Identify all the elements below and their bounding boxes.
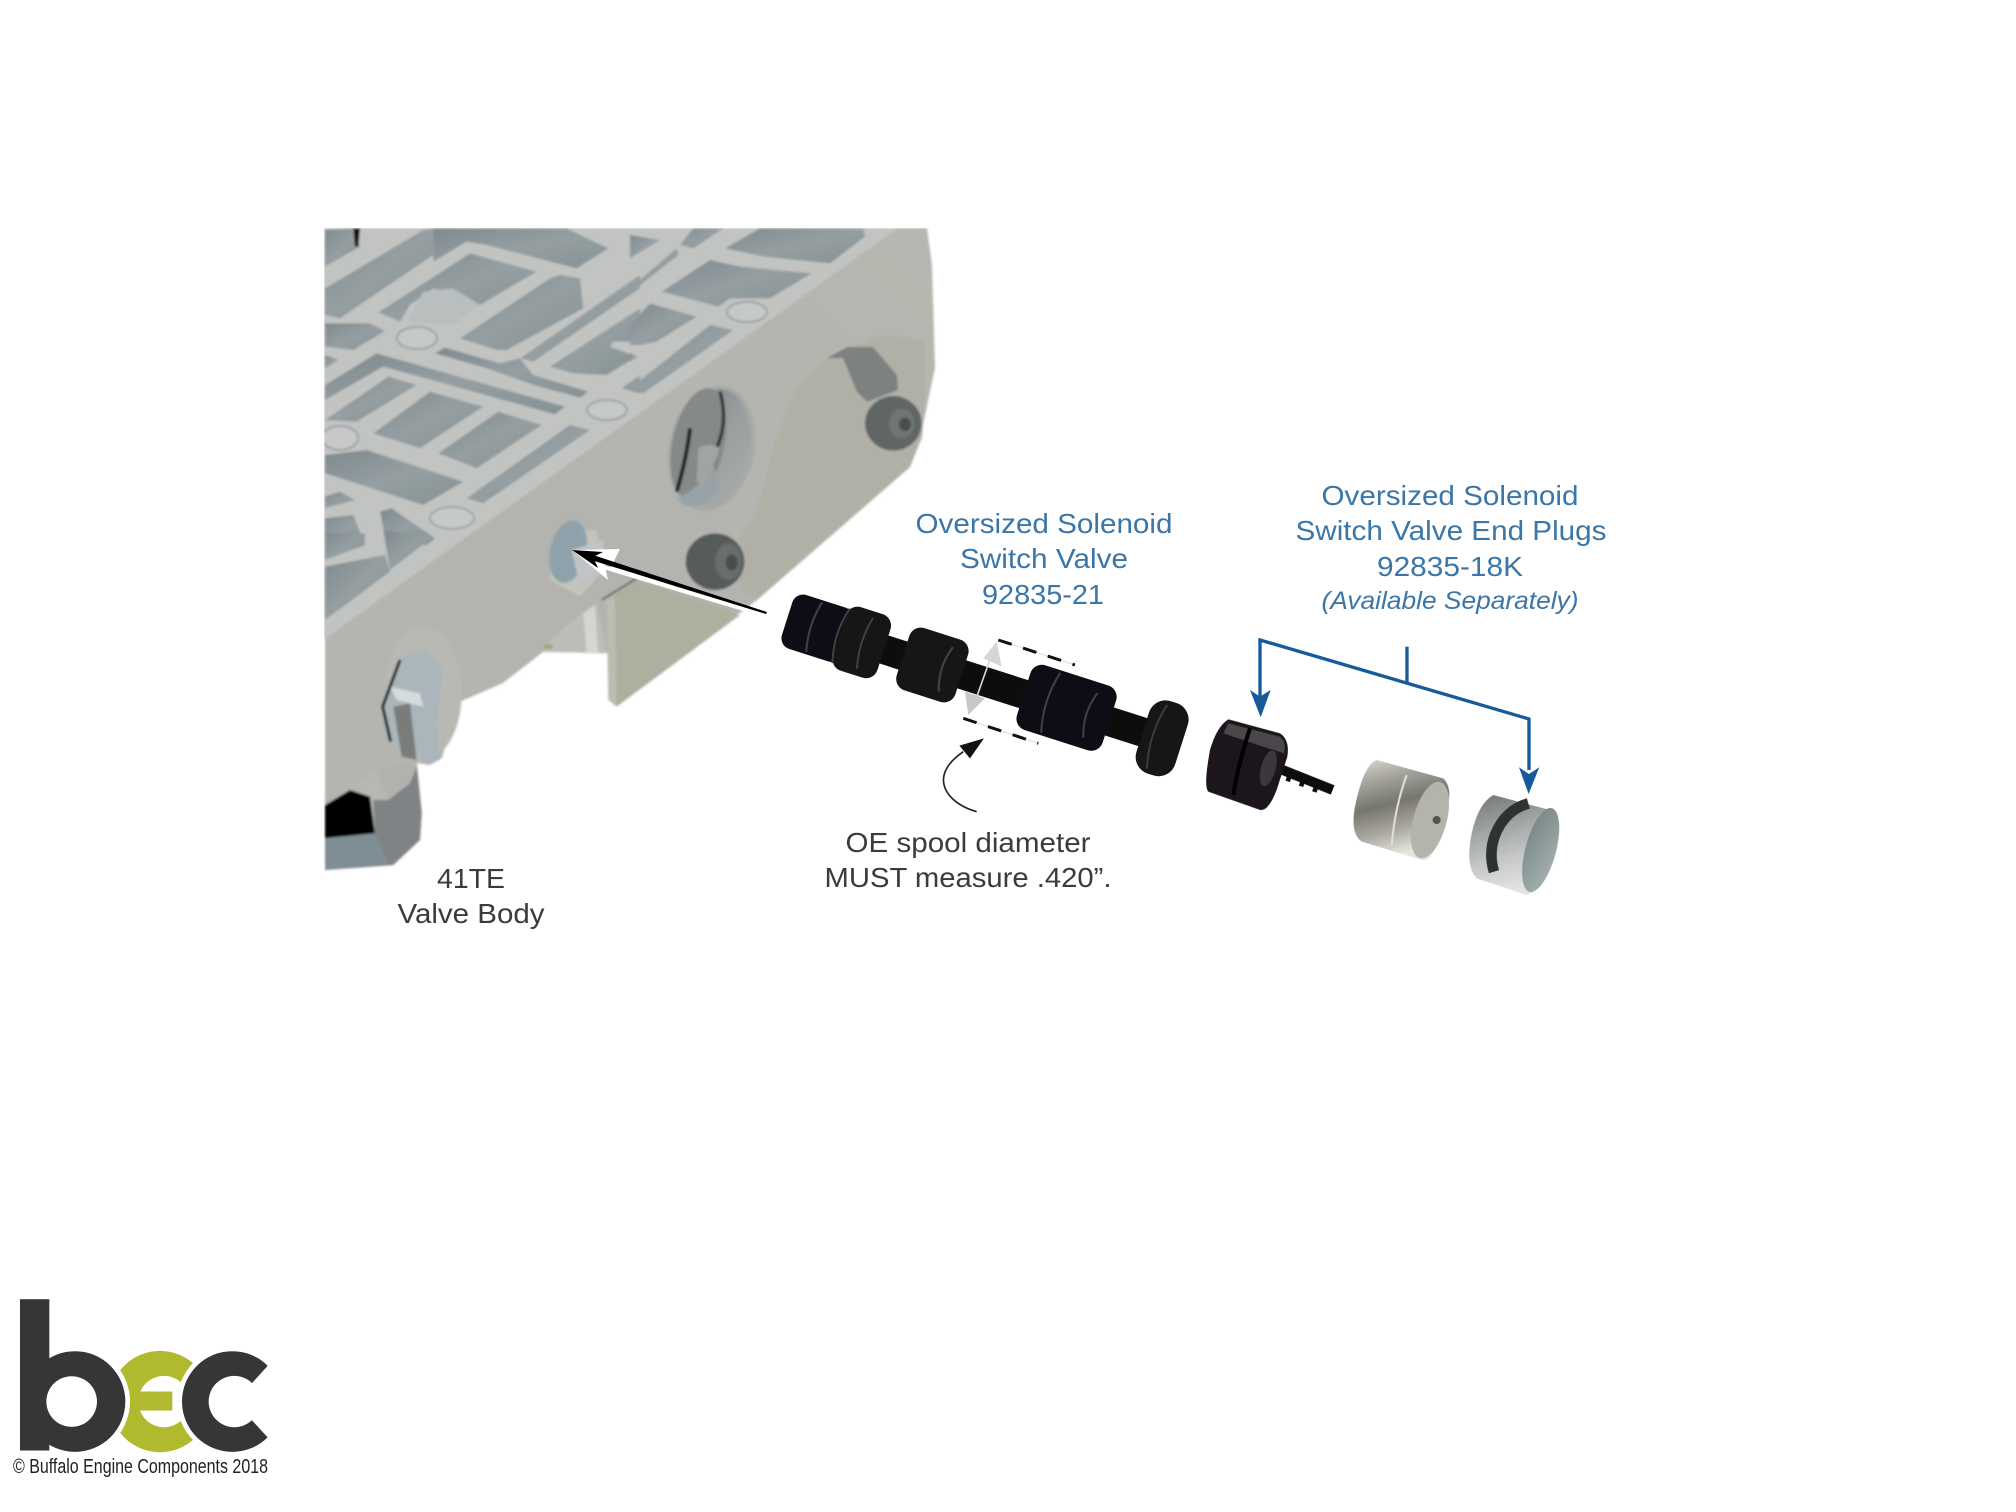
land 1 bbox=[779, 592, 856, 665]
lower mount bbox=[325, 767, 422, 870]
logo: bec bbox=[20, 1299, 302, 1460]
label: end plugs: Switch Valve End Plugs bbox=[1296, 515, 1606, 546]
letter b bbox=[20, 1299, 130, 1457]
label: spool valve: Oversized Solenoid bbox=[916, 508, 1172, 539]
spool valve 92835-21 bbox=[776, 582, 1193, 781]
black end plug with stem bbox=[1206, 719, 1333, 810]
label: OE spool diameter: MUST measure .420”. bbox=[824, 862, 1112, 893]
label: spool valve: 92835-21 bbox=[982, 579, 1104, 610]
lower bore bbox=[444, 700, 462, 748]
label: end plugs: Oversized Solenoid bbox=[1322, 480, 1578, 511]
bolt holes bbox=[322, 302, 767, 529]
screws bbox=[865, 396, 922, 451]
land 3 bbox=[1013, 662, 1120, 754]
label: 41TE valve body bbox=[398, 863, 544, 929]
label: 41TE valve body: 41TE bbox=[437, 863, 505, 894]
boss below small bore bbox=[550, 613, 605, 652]
cover plate bbox=[733, 335, 925, 600]
end cap bbox=[1131, 696, 1193, 781]
curved leader arrow bbox=[944, 752, 977, 812]
upper right bore bbox=[827, 347, 898, 402]
shaft bbox=[862, 630, 1150, 747]
valve body top face with gasket ribs and pockets bbox=[322, 228, 897, 638]
big bore bbox=[668, 386, 755, 510]
label: OE spool diameter bbox=[824, 827, 1112, 893]
steel end plug with o-ring bbox=[1469, 795, 1567, 896]
angled bracket plate bbox=[607, 580, 740, 707]
photo: 41TE valve body bbox=[322, 228, 935, 870]
label: 41TE valve body: Valve Body bbox=[398, 898, 544, 929]
letter c bbox=[177, 1343, 302, 1460]
label: spool valve bbox=[916, 508, 1172, 610]
small bore bbox=[325, 517, 607, 870]
dimension marks: .420 spool diameter bbox=[944, 640, 1075, 812]
label: end plugs: (Available Separately) bbox=[1322, 587, 1578, 615]
label: end plugs bbox=[1296, 480, 1606, 615]
valve body side face bbox=[325, 228, 935, 870]
label: OE spool diameter: OE spool diameter bbox=[846, 827, 1090, 858]
bracket arrows bbox=[1250, 640, 1539, 794]
label: spool valve: Switch Valve bbox=[960, 543, 1128, 574]
end plugs bbox=[1206, 719, 1567, 896]
land 2 bbox=[893, 624, 972, 705]
label: end plugs: 92835-18K bbox=[1377, 551, 1523, 582]
letter e bbox=[109, 1351, 211, 1452]
arrow: valve into bore bbox=[572, 549, 767, 618]
silver end plug bbox=[1353, 760, 1456, 862]
copyright: © Buffalo Engine Components 2018 bbox=[13, 1456, 268, 1478]
